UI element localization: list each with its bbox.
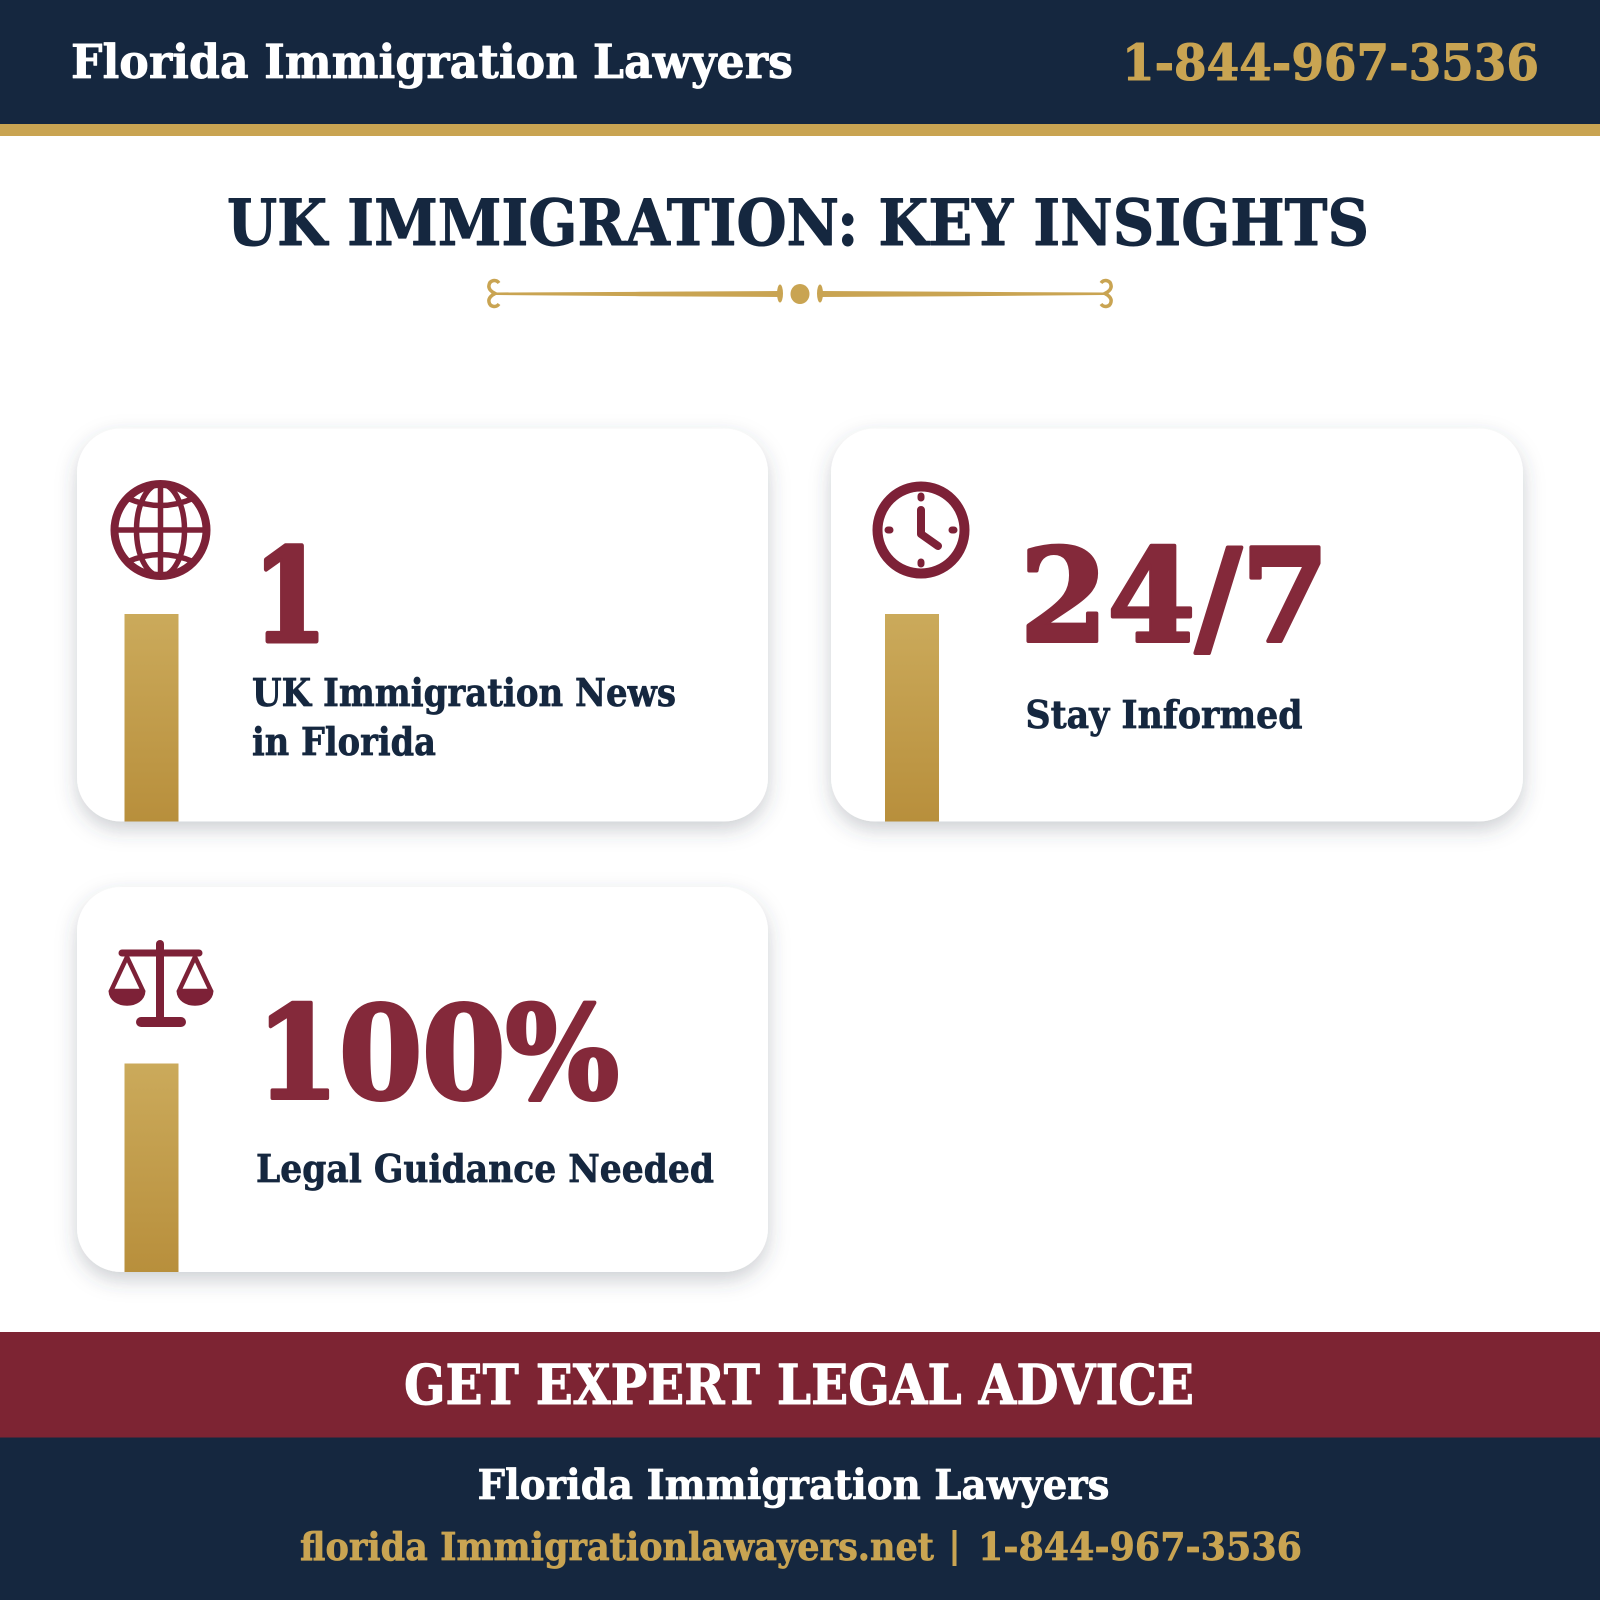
label: UK Immigration News in Florida: UK Immigration News [252,670,676,715]
footer firm name: Florida Immigration Lawyers [478,1461,1110,1509]
call to action text: GET EXPERT LEGAL ADVICE [404,1352,1194,1417]
header firm name: Florida Immigration Lawyers [71,35,793,90]
footer contact line: 1-844-967-3536 [978,1524,1302,1569]
gold accent bar [124,614,178,822]
header phone number: 1-844-967-3536 [1122,33,1539,92]
stat: 24/7: 24/7 [1020,522,1329,672]
label: UK Immigration News in Florida [252,670,676,764]
panel: stay informed card [831,428,1523,822]
call to action banner [0,1332,1600,1438]
icon: clock [878,486,964,574]
label: UK Immigration News in Florida: in Florida [252,719,436,764]
panel: UK immigration news card [77,428,768,822]
stat: 100%: 100% [256,979,619,1129]
footer contact line [300,1524,1302,1569]
header bar [0,0,1600,136]
gold accent bar [124,1064,178,1272]
icon: scales of justice [109,944,213,1022]
footer [0,1438,1600,1600]
stat: 1: 1 [253,522,327,672]
label: Stay Informed: Stay Informed [1026,692,1302,737]
panel: legal guidance card [77,887,768,1272]
footer contact line: florida Immigrationlawayers.net [300,1524,934,1569]
title: UK IMMIGRATION: KEY INSIGHTS [227,186,1369,261]
label: Legal Guidance Needed: Legal Guidance Needed [256,1146,714,1191]
gold accent bar [885,614,939,822]
icon: globe [114,484,206,576]
title ornament [489,281,1111,306]
